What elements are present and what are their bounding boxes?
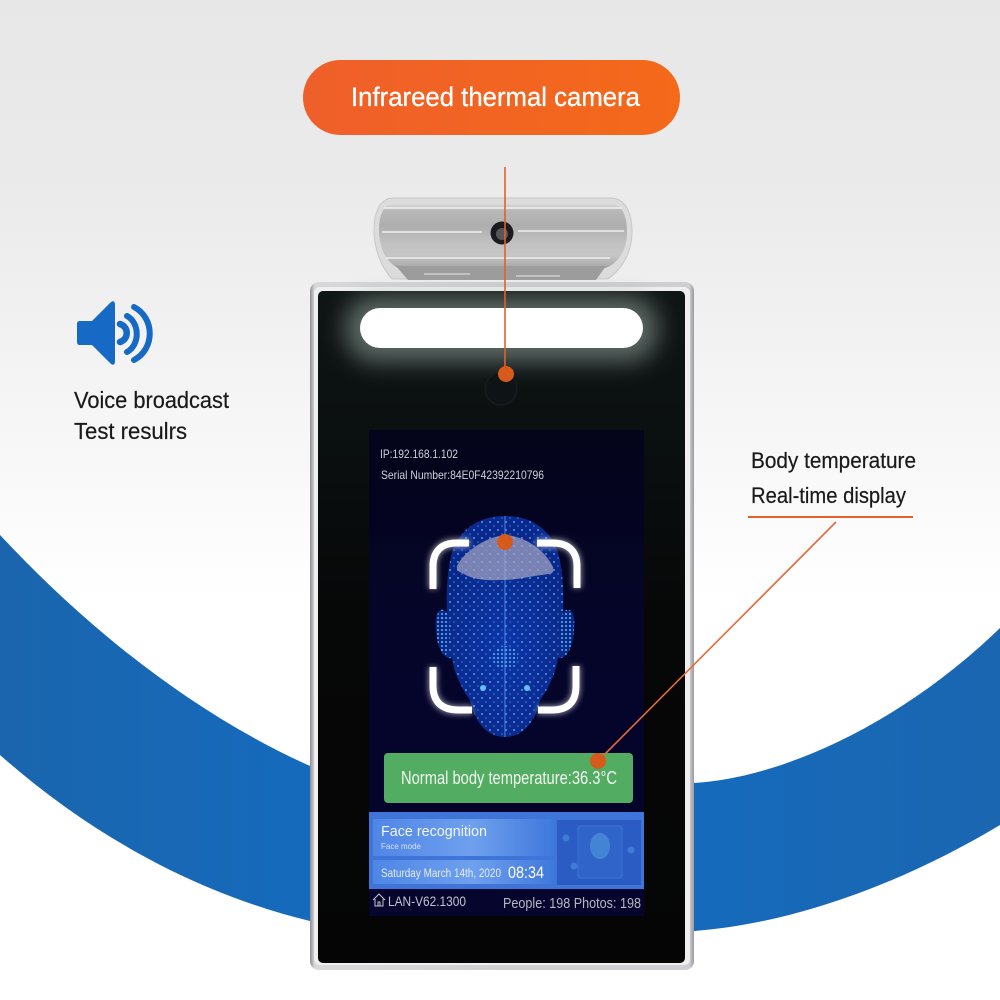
text: voice broadcast: Test resulrs bbox=[74, 418, 187, 444]
face recognition tile bbox=[373, 819, 554, 856]
forehead measurement zone bbox=[457, 535, 553, 580]
serial number: Serial Number:84E0F42392210796 bbox=[381, 468, 544, 482]
text: body temperature real-time display: Real-time display bbox=[751, 483, 906, 508]
LED fill light bar bbox=[360, 308, 643, 348]
face recognition tile: Face mode bbox=[381, 841, 421, 851]
text: body temperature real-time display: Body temperature bbox=[751, 448, 916, 473]
date and time tile: Saturday March 14th, 2020 bbox=[381, 868, 501, 880]
face recognition tile: Face recognition bbox=[381, 823, 487, 840]
device: face recognition terminal bbox=[310, 198, 694, 970]
text: voice broadcast: Voice broadcast bbox=[74, 387, 230, 413]
title pill: Infrareed thermal camera bbox=[351, 82, 641, 112]
LCD screen bbox=[369, 430, 644, 916]
firmware version: LAN-V62.1300 bbox=[388, 893, 466, 909]
callout: body temperature pointer bbox=[590, 522, 836, 769]
info panel bbox=[369, 812, 644, 889]
frame highlight bbox=[314, 287, 690, 965]
callout: thermal camera pointer bbox=[498, 167, 514, 382]
callout: forehead point bbox=[497, 534, 513, 550]
camera module bbox=[374, 198, 632, 280]
3D dotted head scan bbox=[436, 516, 574, 737]
icon: home bbox=[373, 894, 385, 906]
people and photos count: People: 198 Photos: 198 bbox=[503, 896, 641, 912]
front camera lens bbox=[485, 373, 517, 405]
title pill bbox=[303, 60, 680, 135]
light glow bbox=[345, 296, 658, 362]
IP address: IP:192.168.1.102 bbox=[380, 447, 458, 461]
text: voice broadcast bbox=[74, 387, 230, 444]
temperature status bar: Normal body temperature:36.3°C bbox=[401, 767, 617, 788]
face thumbnail tile bbox=[557, 820, 641, 885]
text: body temperature real-time display bbox=[748, 448, 916, 517]
face frame brackets bbox=[433, 543, 577, 710]
icon: speaker bbox=[77, 301, 150, 365]
blue curved band bbox=[0, 535, 1000, 940]
temperature status bar bbox=[384, 753, 633, 803]
metal frame bbox=[310, 282, 694, 970]
date and time tile bbox=[373, 860, 554, 884]
date and time tile: 08:34 bbox=[508, 863, 544, 882]
black front glass bbox=[318, 291, 685, 963]
